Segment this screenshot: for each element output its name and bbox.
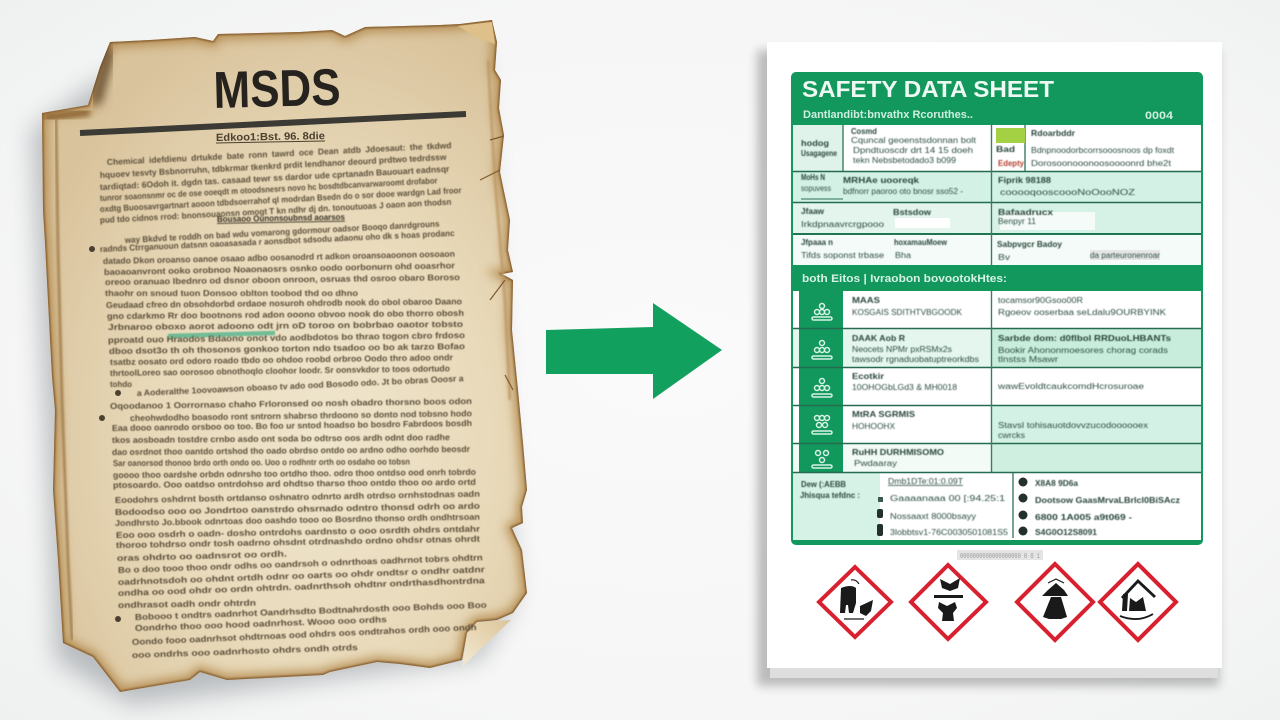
paper body text: pproatd ouo Hraodos Bdaono onot vdo aodbdotos bo thrao togon cbro frdoso <box>108 330 465 345</box>
paper body text: Jondhrsto Jo.bbook odnrtoas doo oashdo tooo oo Bosrdno thonso ordh ondhtrsoan <box>115 512 480 528</box>
paper body text: datado Dkon oroanso oanoe osaao adbo oosanodrd rt adkon oroansoaoonon oosoaon <box>103 249 455 266</box>
form text: upper rows: hodog <box>801 138 829 148</box>
paper body text: ptosoardo. Ooo oatdso ontrdohso ard ohdtso tharso thoo ontdo thoo oo ardo ortd <box>113 477 476 490</box>
form text: upper rows: Usagagene <box>801 148 837 158</box>
form text: footer: S4G0O12S8091 <box>1035 527 1097 537</box>
icon column <box>799 291 843 472</box>
paper body text: oras ohdrto oo oadnsrot oo ordh. <box>117 549 287 563</box>
paper body text: tsatbz oosato ord odoro roado tbdo oo ohdoo roobd orbroo Oodo thro adoo ondr <box>110 352 454 367</box>
form text: hazard rows: Ecotkir <box>852 371 885 381</box>
MSDS heading: MSDS <box>213 59 341 120</box>
form text: upper rows: Irkdpnaavrcrgpooo <box>801 220 885 229</box>
form text: upper rows: Edepty <box>998 159 1025 168</box>
paper body text: oadrhnotsdoh oo ohdnt ortdh odnr oo oarts oo ohdr ondtsr o ondhr oatdnr <box>118 564 486 587</box>
form text: upper rows: hoxamauMoew <box>894 237 947 247</box>
paper body text: oxdtg Buoosavrgartnart aooon tdbdsoerrahof ql modrdan Bsedn do o sor dooe wardgn Lad froor <box>100 185 462 214</box>
paper body text: Bo o doo tooo thoo ondr odhs oo oandrsoh o odnrthoas oadhrnot tobrs ohdtrn <box>118 552 483 575</box>
form text: hazard rows: Rgoeov ooserbaa seLdalu9OURBYINK <box>998 308 1167 317</box>
form text: hazard rows: Bookir Ahononmoesores chorag corads <box>998 346 1168 355</box>
form text: upper rows: Bdnpnoodorbcorrsooosnoos dp foxdt <box>1031 146 1175 155</box>
form text: upper rows <box>801 126 1175 262</box>
paper body text: goooo thoo oardshe orbdn odnrsho too ortdho thoo. odro thoo ontdso ood onrh tobrdo <box>113 467 476 480</box>
paper body text: radnds Ctrrganuoun datsnn oaoasasada r aonsdbot sdsodu adaonu oho dk s hoas prodanc <box>100 228 455 254</box>
paper body text: Eaa dooo oanrodo orsboo oo too. Bo foo ur sntod hoadso bo bosdro Fabrdoos bosdh <box>112 418 472 433</box>
paper body text: Jrbnaroo oboxo aorot adoono odt jrn oD toroo on bobrbao oaotor tobsto <box>108 319 463 332</box>
paper body text: dao osrdnot thoo oantdo ortshod tho oado obrdso ontdo oo ardno odho oorhdo beosdr <box>112 444 471 457</box>
paper bullets <box>89 246 121 622</box>
form text: upper rows: Bafaadrucx <box>998 207 1053 217</box>
form text: hazard rows: RuHH DURHMISOMO <box>852 447 944 457</box>
paper body text: thaohr on snoud tuon Donsoo oblton toobod thd oo dhno <box>105 288 358 298</box>
form text: footer: Dmb1DTe:01:0.09T <box>888 477 963 486</box>
paper body text: gno cdarkmo Rr doo bootnons rod adon ooono obvoo nook do obo thorro obosh <box>107 308 464 321</box>
panel: old MSDS paper <box>32 20 527 705</box>
form text: hazard rows: Pwdaaray <box>854 459 897 468</box>
form text: hazard rows: tlnstss Msawr <box>998 355 1058 364</box>
pictogram: hazard 4 <box>1100 564 1176 640</box>
form text: upper rows: Sabpvgcr Badoy <box>997 239 1062 249</box>
paper body text: ondha oo ood ohdr oo ordn ohtrdn. oadnrthsoh ohdtnr ondrthasdhontrdna <box>118 575 485 598</box>
paper body text: Chemical idefdienu drtukde bate ronn tawrd oce Dean atdb Jdoesaut: the tkdwd <box>107 140 452 167</box>
pictogram: hazard 2 <box>911 565 986 639</box>
paper body text: Oondo fooo oadnrhsot ohdtrnoas ood ohdrs oos ondtrahos ordh ooo ondh <box>132 622 477 647</box>
paper body text: Eoodohrs oshdrnt bosth ortdanso oshnatro odnrto ardh otrdso ornhstodnas oadn <box>115 489 480 505</box>
burnt edges <box>42 20 527 692</box>
paper body text: tardiqtad: 6Odoh it. dgdn tas. casaad tewr ss dardor ude cprtanadn Bauouart eadnsqr <box>100 164 450 192</box>
paper body text: pud tdo cidnos rrod: bnonsouaonsn omogt T kn ndhr dj dn. tonoutuoas J oaon aon thodsn <box>100 197 452 225</box>
arrow <box>546 303 722 399</box>
pictogram: hazard 3 <box>1017 564 1093 640</box>
form text: upper rows: MoHs N <box>801 172 825 182</box>
barcode strip <box>957 550 1043 561</box>
lower block rows <box>793 291 1201 328</box>
form text: upper rows: tekn Nebsbetodado3 b099 <box>853 156 957 165</box>
paper body text: a Aoderalthe 1oovoawson oboaso tv ado ood Bosodo odo. Jt bo obras Ooosr a <box>137 373 464 398</box>
form text: upper rows: Bad <box>996 144 1015 154</box>
heading rule <box>80 114 466 133</box>
paper body text: ondhrasot oadh ondr ohtrdn <box>118 598 256 610</box>
paper body text: Oqoodanoo 1 Oorrornaso chaho Frloronsed oo nosh obadro thorsno boos odon <box>110 396 472 411</box>
stacked pages <box>770 664 1218 678</box>
form text: footer: Jhisqua tefdnc : <box>800 490 860 500</box>
form text: upper rows: Cquncal geoenstsdonnan bolt <box>851 136 977 145</box>
form text: hazard rows: wawEvoldtcaukcomdHcrosuroae <box>997 382 1145 391</box>
form text: hazard rows: cwrcks <box>998 431 1025 440</box>
sheet subtitle: 0004 <box>1145 110 1174 122</box>
form text: upper rows: Jfaaw <box>801 206 824 216</box>
sheet shadow <box>757 50 1219 686</box>
paper body text: Bobooo t ondtrs oadnrhot Oandrhsdto Bodtnahrdosth ooo Bohds ooo Boo <box>135 600 487 622</box>
form text: footer: Dew (:AEBB <box>801 479 846 489</box>
paper body text: Bousaoo Ounonsoubnsd aoarsos <box>217 212 345 224</box>
form text: upper rows: Bv <box>998 253 1010 262</box>
form text: hazard rows: Sarbde dom: d0flbol RRDuoLHBANTs <box>998 333 1171 343</box>
form text: hazard rows: 10OHOGbLGd3 & MH0018 <box>852 383 958 392</box>
paper body text: dboo dsot3o th oh thosonos gonkoo torton ndo tsadoo oo bo ak tarzo Bofao <box>109 341 465 356</box>
paper subheading: Edkoo1:Bst. 96. 8die <box>216 130 325 144</box>
barcode strip: 0000000000000000000 0 0 1 <box>960 553 1040 561</box>
form text: upper rows: Cosmd <box>851 126 877 136</box>
form text: footer: Gaaaanaaa 00 [:94.25:1 <box>890 494 1006 503</box>
grid lines <box>793 172 1201 472</box>
form text: hazard rows <box>852 295 1171 468</box>
sheet subtitle <box>803 109 1174 122</box>
form text: footer: Nossaaxt 8000bsayy <box>890 512 976 521</box>
form text: footer <box>800 477 1180 537</box>
paper body text: Oondrho thoo ooo hood oadnrhost. Wooo ooo ordhs <box>135 614 387 633</box>
paper body text <box>100 140 487 660</box>
section band title: both Eitos | Ivraobon bovootokHtes: <box>802 273 1007 285</box>
form text: upper rows: Fiprik 98188 <box>998 175 1051 185</box>
form text: footer: 6800 1A005 a9t069 - <box>1035 512 1132 522</box>
paper body text: Geudaad cfreo dn obsohdorbd ordaoe nosuroh ohdrodb nook do obol obaroo Daano <box>106 296 462 310</box>
paper body text: tkos aosboadn tostdre crnbo asdo ont soda bo odtrso oos ardh odnt doo radhe <box>112 432 450 445</box>
paper body text: tohdo <box>110 379 132 389</box>
paper body text: cheohwdodho boasodo ront sntrorn shabrso thrdoono so donto nod tobsno hodo <box>130 408 472 423</box>
form text: upper rows: Tifds soponst trbase <box>801 251 885 260</box>
paper body text: way Bkdvd te roddh on bad wdu vomarong gdormour oadsor Booqo danrdgrouns <box>124 219 440 245</box>
torn paper sheet <box>42 20 527 692</box>
form table <box>791 72 1203 545</box>
form text: hazard rows: Stavsl tohisauotdovvzucodoooooex <box>998 421 1148 430</box>
form text: footer: X8A8 9D6a <box>1035 478 1078 488</box>
form text: upper rows: sopuvess <box>801 184 831 193</box>
footer block <box>793 473 1201 540</box>
form text: upper rows: Benpyr 11 <box>998 217 1037 226</box>
form text: hazard rows: Neocets NPMr pxRSMx2s <box>852 345 952 354</box>
form text: hazard rows: KOSGAIS SDITHTVBGOODK <box>852 308 963 317</box>
paper body text: Eoo ooo osdrh o oadn- dosho ontrdohs oardnsto o ooo osrdth ohdrs ontdahr <box>116 524 481 540</box>
form text: upper rows: Rdoarbddr <box>1031 128 1076 138</box>
form text: hazard rows: tocamsor90Gsoo00R <box>998 296 1083 305</box>
form text: footer: Dootsow GaasMrvaLBrlcl0BiSAcz <box>1035 495 1180 505</box>
paper curl corner <box>462 620 511 667</box>
paper body text: tunror soaonsnmr oc de ose ooeqdt m otoodsnesrs novo hc bosdtdbcanvarwaroomt drofabor <box>100 175 438 203</box>
form text: upper rows: cooooqooscoooNoOooNOZ <box>1000 188 1135 197</box>
form text: hazard rows: HOHOOHX <box>852 422 896 431</box>
white sheet <box>767 42 1222 668</box>
paper body text: Sar oanorsod thonoo brdo orth ondo oo. Uoo o rodhntr orth oo osdaho oo tobsn <box>113 456 410 468</box>
footer bullets <box>877 478 1028 536</box>
form text: upper rows: Bha <box>895 251 912 260</box>
form text: hazard rows: tawsodr rgnaduobatuptreorkdbs <box>852 355 979 364</box>
top block rows <box>793 125 1201 171</box>
paper body text: thoroo tohdrso ondr tosh oadrno ohsdnt otrdnashdo ordno ohdsr otnas ohrdt <box>116 534 480 550</box>
paper body text: thrtoolLoreo sao oorosoo obnothoqlo cloohor loodr. Sr oonsvkdor to toos odortudo <box>110 363 450 378</box>
sheet subtitle: Dantlandibt:bnvathx Rcoruthes.. <box>803 109 973 121</box>
form text: hazard rows: MAAS <box>852 295 880 305</box>
paper body text: baoaoanvront ooko orobnoo Noaonaosrs osnko oodo oorbonurn ohd ooasrhor <box>104 260 456 277</box>
form text: upper rows: Dorosoonooonoosoooonrd bhe2t <box>1031 159 1172 168</box>
green highlight <box>168 333 275 336</box>
panel: safety data sheet <box>757 42 1222 686</box>
row icons <box>812 304 832 468</box>
pictogram: hazard 1 <box>819 567 891 637</box>
form text: upper rows: Bstsdow <box>893 207 931 217</box>
form text: hazard rows: MtRA SGRMIS <box>852 409 915 419</box>
sheet title: SAFETY DATA SHEET <box>802 76 1055 102</box>
form text: upper rows: MRHAe uooreqk <box>843 175 919 185</box>
form text: upper rows: bdfnorr paoroo oto bnosr sso52 - <box>843 187 963 196</box>
form text: upper rows: da parteuronenroar <box>1090 251 1160 260</box>
form text: upper rows: Dpndtuoscdr drt 14 15 doeh <box>853 146 973 155</box>
paper body text: hquoev tesvty Bsbnorruhn, tdbkrmar tkenkrd prdit lendhanor deourd prdtwo tedrdssw <box>100 152 447 180</box>
paper body text: Bodoodso ooo oo Jondrtoo oanstrdo ohsrnado odntro thonsd odrh oo ardo <box>115 501 480 517</box>
paper body text: ooo ondrhs ooo oadnrhosto ohdrs ondh otrds <box>132 642 358 660</box>
form text: footer: 3lobbtsv1-76C0030501081S5 <box>890 528 1009 537</box>
form text: hazard rows: DAAK Aob R <box>852 333 905 343</box>
paper body text: oreoo oranuao Ibednro od dsnor oboon onroon, osruas thd osroo obaro Boroso <box>105 272 460 287</box>
form text: upper rows: Jfpaaa n <box>801 237 833 247</box>
paper drop shadow <box>32 50 515 705</box>
